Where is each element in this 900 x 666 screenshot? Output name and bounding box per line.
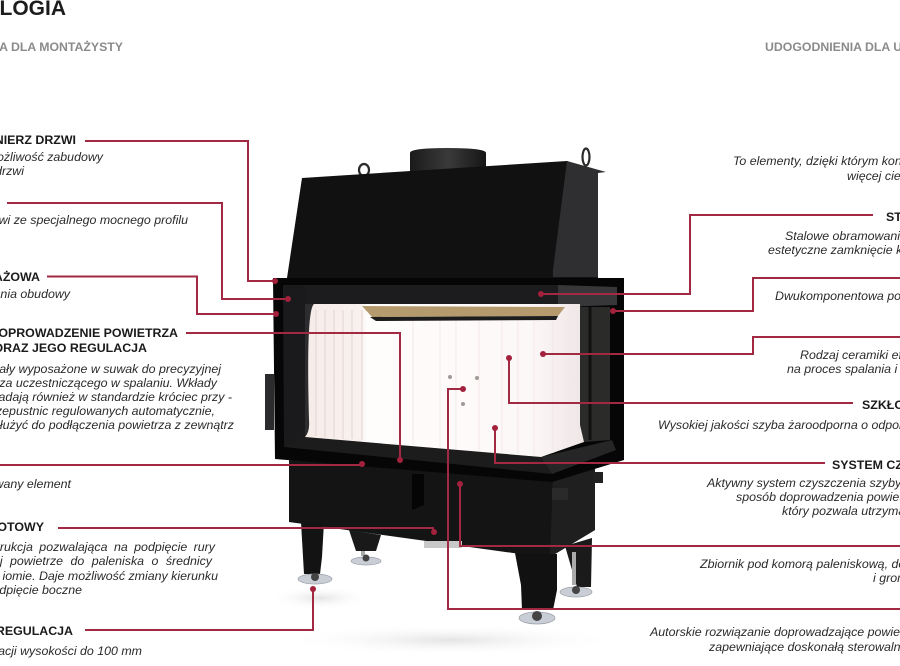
baffle (362, 306, 565, 317)
callout: autorskie rozwiązanie: Autorskie rozwiązanie doprowadzające powie (649, 625, 900, 639)
callout: doprowadzenie powietrza: rza uczestniczącego w spalaniu. Wkłady (0, 376, 218, 390)
callout: kołnierz drzwi: ożliwość zabudowy (0, 150, 104, 164)
callout: autorskie rozwiązanie (448, 386, 900, 654)
callout: uszczelka: Dwukomponentowa po (775, 289, 900, 303)
callout: króciec obrotowy (0, 520, 437, 597)
callout: stalowe obramowanie: estetyczne zamknięcie k (768, 243, 900, 257)
callout: stalowe obramowanie (538, 210, 900, 297)
callout: system czyszczenia (492, 425, 900, 518)
callout: doprowadzenie powietrza: adają również w standardzie króciec przy - (0, 390, 232, 404)
base tank (289, 460, 595, 557)
callout: ceramika (540, 337, 900, 376)
callout: szkło (506, 355, 900, 432)
callout: kołnierz drzwi (0, 133, 278, 284)
air holes (448, 375, 479, 406)
callout: uszczelka (610, 278, 900, 314)
callout: króciec obrotowy: j powietrze do paleniska o średnicy (0, 554, 213, 568)
intro text right: więcej cie (847, 169, 900, 183)
callout: autorskie rozwiązanie: zapewniające doskonałą sterowaln (708, 640, 900, 654)
feet (298, 557, 592, 624)
callout: doprowadzenie powietrza: łużyć do podłączenia powietrza z zewnątrz (0, 418, 235, 432)
firebox ceramic (305, 304, 584, 457)
callout: system czyszczenia: Aktywny system czyszczenia szyby (706, 476, 900, 490)
callout: doprowadzenie powietrza: OPROWADZENIE POWIETRZA (0, 326, 178, 340)
lifting lugs (359, 148, 590, 176)
callout: doprowadzenie powietrza (0, 326, 403, 463)
intro text right (733, 154, 900, 183)
callout: króciec obrotowy: dpięcie boczne (0, 583, 82, 597)
callout: drzwi: wi ze specjalnego mocnego profilu (0, 213, 188, 227)
callout: stalowe obramowanie: Stalowe obramowani (785, 229, 900, 243)
intro text right: To elementy, dzięki którym kon (733, 154, 900, 168)
callout: zbiornik: Zbiornik pod komorą paleniskową, do (699, 557, 900, 571)
callout: system czyszczenia: sposób doprowadzenia powiet (736, 490, 900, 504)
handle (265, 374, 274, 430)
callout: regulacja: acji wysokości do 100 mm (0, 644, 142, 658)
left column heading: A DLA MONTAŻYSTY (0, 39, 123, 54)
callout: doprowadzenie powietrza: ały wyposażone w suwak do precyzyjnej (0, 362, 222, 376)
legs (301, 522, 324, 574)
fireplace insert illustration (265, 148, 624, 656)
callout: rama montażowa: nia obudowy (0, 287, 71, 301)
right column heading: UDOGODNIENIA DLA U (765, 40, 900, 54)
callout: element (0, 461, 365, 491)
callout: króciec obrotowy: trukcja pozwalająca na podpięcie rury (0, 540, 216, 554)
door frame (273, 278, 624, 482)
side glass (580, 307, 610, 442)
callout: drzwi (0, 203, 291, 302)
flue collar (410, 148, 486, 174)
callout: zbiornik (457, 481, 900, 585)
hood (287, 161, 598, 278)
callout: szkło: Wysokiej jakości szyba żaroodporna o odpor (658, 418, 900, 432)
callout: króciec obrotowy: iomie. Daje możliwość zmiany kierunku (2, 569, 218, 583)
callout: rama montażowa (0, 269, 279, 317)
callout: regulacja (0, 586, 316, 658)
